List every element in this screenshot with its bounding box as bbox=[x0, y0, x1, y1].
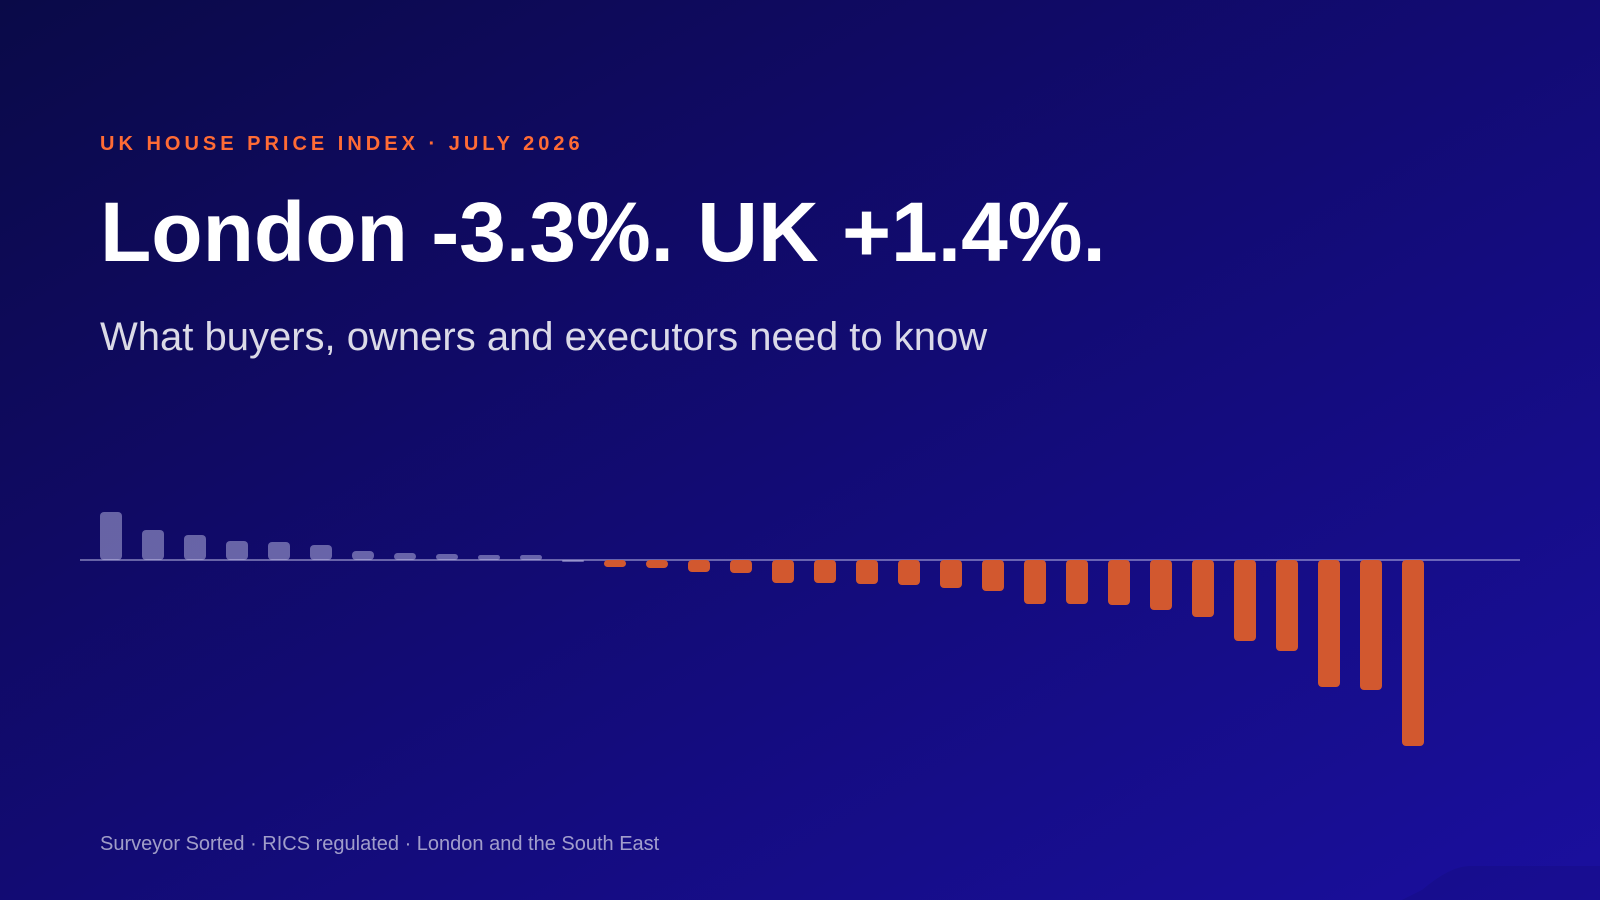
footer: Surveyor Sorted · RICS regulated · London and the South East bbox=[100, 833, 659, 855]
eyebrow label: UK HOUSE PRICE INDEX · JULY 2026 bbox=[100, 133, 584, 155]
title: London -3.3%. UK +1.4%. bbox=[100, 185, 1106, 279]
subtitle: What buyers, owners and executors need to know bbox=[100, 315, 987, 359]
negative bars bbox=[604, 560, 1424, 746]
positive bars bbox=[100, 512, 584, 562]
